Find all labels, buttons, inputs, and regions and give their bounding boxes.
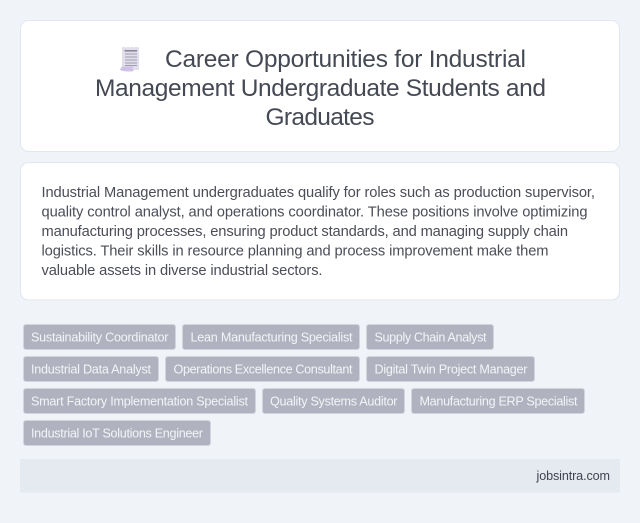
description text: Industrial Management undergraduates qualify for roles such as production supervisor,	[42, 185, 595, 201]
description text: quality control analyst, and operations coordinator. These positions involve optimizing	[42, 204, 588, 220]
tag: Manufacturing ERP Specialist	[412, 388, 584, 414]
description text: valuable assets in diverse industrial sectors.	[42, 263, 322, 279]
tag: Industrial IoT Solutions Engineer	[24, 420, 210, 446]
tag: Smart Factory Implementation Specialist	[24, 388, 256, 414]
tag: Manufacturing ERP Specialist: Manufacturing ERP Specialist	[420, 394, 578, 408]
tag: Operations Excellence Consultant: Operations Excellence Consultant	[174, 362, 353, 376]
tag: Supply Chain Analyst	[366, 324, 494, 350]
tag: Quality Systems Auditor	[262, 388, 404, 414]
tag: Supply Chain Analyst: Supply Chain Analyst	[374, 330, 487, 344]
tag: Smart Factory Implementation Specialist: Smart Factory Implementation Specialist	[31, 394, 248, 408]
tag: Digital Twin Project Manager	[366, 356, 534, 382]
icon: paper scroll	[120, 47, 139, 72]
panel: career tags	[24, 324, 584, 446]
tag: Lean Manufacturing Specialist	[182, 324, 360, 350]
footer bar	[20, 459, 620, 492]
tag: Quality Systems Auditor: Quality Systems Auditor	[270, 394, 398, 408]
panel: title card	[20, 20, 620, 152]
tag: Industrial IoT Solutions Engineer: Industrial IoT Solutions Engineer	[31, 426, 203, 440]
description text: manufacturing processes, ensuring product standards, and managing supply chain	[42, 224, 568, 240]
description text	[42, 185, 595, 279]
description text: logistics. Their skills in resource planning and process improvement make them	[42, 244, 548, 260]
heading: Career Opportunities for Industrial	[165, 46, 526, 73]
tag: Digital Twin Project Manager: Digital Twin Project Manager	[374, 362, 528, 376]
tag: Industrial Data Analyst: Industrial Data Analyst	[31, 362, 152, 376]
tag: Sustainability Coordinator	[24, 324, 176, 350]
heading	[95, 46, 546, 131]
tag: Industrial Data Analyst	[24, 356, 158, 382]
panel: description card	[20, 162, 620, 300]
tag: Sustainability Coordinator: Sustainability Coordinator	[31, 330, 168, 344]
footer source text: jobsintra.com	[536, 469, 610, 483]
tag: Lean Manufacturing Specialist: Lean Manufacturing Specialist	[190, 330, 353, 344]
heading: Management Undergraduate Students and	[95, 75, 546, 102]
tag: Operations Excellence Consultant	[166, 356, 360, 382]
heading: Graduates	[266, 104, 374, 131]
